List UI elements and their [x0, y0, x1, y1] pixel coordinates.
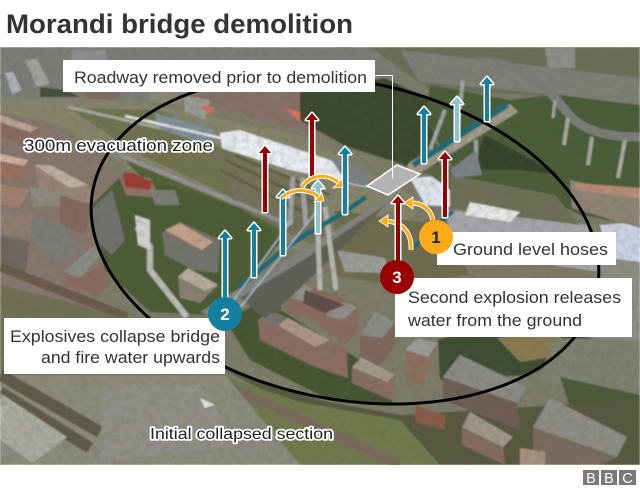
- label: roadway removed: Roadway removed prior to demolition: [74, 69, 367, 87]
- label: ground level hoses: [437, 232, 616, 265]
- roadway section removed: [367, 165, 420, 195]
- label: explosives: [4, 318, 225, 374]
- arrow: red centre: [306, 113, 318, 178]
- orange hose arrows: [281, 176, 433, 250]
- hose arc lower: [379, 215, 411, 250]
- label: explosives: and fire water upwards: [41, 349, 220, 367]
- label: second explosion: Second explosion releases: [408, 289, 621, 307]
- label: explosives: Explosives collapse bridge: [10, 328, 220, 346]
- label: evacuation zone: 300m evacuation zone: [24, 136, 213, 155]
- marker 1: [419, 220, 453, 254]
- BBC logo: C: [622, 471, 633, 487]
- title: Morandi bridge demolition: [6, 9, 353, 39]
- label: second explosion: [395, 278, 632, 337]
- marker 2: 2: [220, 305, 230, 324]
- BBC logo: B: [586, 471, 596, 487]
- arrow: light blue far right: [451, 97, 463, 141]
- apartments: [230, 306, 394, 402]
- water arrows: [219, 77, 493, 302]
- evacuation zone ellipse: [61, 33, 629, 447]
- arrow: teal centre left: [277, 190, 289, 255]
- arrow: teal centre right: [339, 147, 351, 214]
- leader line: [375, 76, 392, 178]
- BBC logo: [583, 470, 636, 487]
- arrow: light blue centre: [312, 181, 324, 233]
- marker 3: [380, 260, 414, 294]
- BBC logo: B: [604, 471, 614, 487]
- label: ground level hoses: Ground level hoses: [453, 241, 608, 259]
- arrow: red left: [259, 146, 271, 212]
- label: initial collapsed section: Initial collapsed section: [150, 426, 333, 443]
- arrow: teal left: [248, 223, 260, 277]
- hose arc upper left: [281, 191, 324, 202]
- hose arc from point 1: [404, 197, 433, 220]
- arrow: red right: [439, 152, 451, 217]
- arrow: teal far right: [481, 77, 493, 121]
- bridge: [200, 198, 393, 322]
- arrow: teal far left: [219, 231, 231, 302]
- marker 3: 3: [392, 268, 402, 287]
- arrow: teal right: [418, 107, 430, 163]
- label: roadway removed: [63, 60, 375, 92]
- marker 1: 1: [431, 228, 441, 247]
- label: second explosion: water from the ground: [407, 312, 582, 330]
- hose arc upper right: [302, 176, 343, 188]
- arrow: red from point 3: [392, 196, 404, 262]
- marker 2: [208, 297, 242, 331]
